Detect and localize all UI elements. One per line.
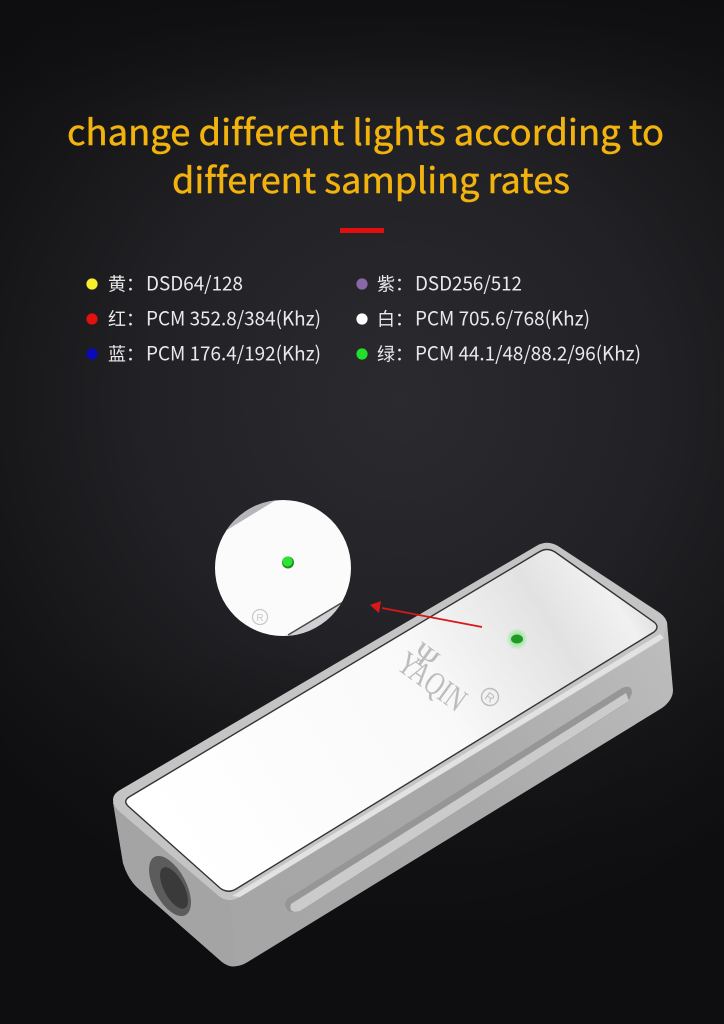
legend: sampling rate colours [86,268,641,366]
magnified green light [282,556,294,568]
legend item: red: 红： [108,306,144,332]
rim highlight along lower edge [232,634,664,897]
red accent bar [340,228,384,233]
legend item: yellow: 黄： [108,270,144,296]
legend item: green: PCM 44.1/48/88.2/96(Khz) [415,338,641,366]
legend item: white: PCM 705.6/768(Khz) [415,302,590,332]
legend item: blue: PCM 176.4/192(Khz) [146,338,321,366]
legend item: yellow [86,268,243,296]
audio jack port [140,849,200,923]
device front end face [113,802,236,966]
side groove [285,687,632,912]
legend item: yellow: DSD64/128 [146,268,243,296]
device top plate [126,550,657,891]
magnified view of indicator light [215,500,351,636]
device side wall [113,622,673,966]
title [67,105,664,204]
legend item: green: 绿： [377,340,413,366]
legend item: blue: 蓝： [108,340,144,366]
logo: YAQIN: Ψ [405,635,446,678]
legend item: white: 白： [377,306,413,332]
title: different sampling rates [172,153,570,204]
logo: YAQIN [390,635,502,719]
legend item: purple: 紫： [377,270,413,296]
legend item: purple [356,268,522,296]
logo: YAQIN: YAQIN [390,645,473,719]
magnified view of indicator light: R [256,613,264,624]
arrow: from light to magnified view [370,601,482,627]
device top rim [113,543,667,900]
logo: registered mark: R [482,689,498,706]
device: silver YAQIN DAC [113,543,673,966]
legend item: red: PCM 352.8/384(Khz) [146,302,321,332]
title: change different lights according to [67,105,664,156]
legend item: purple: DSD256/512 [415,268,522,296]
indicator light: green [506,628,528,650]
